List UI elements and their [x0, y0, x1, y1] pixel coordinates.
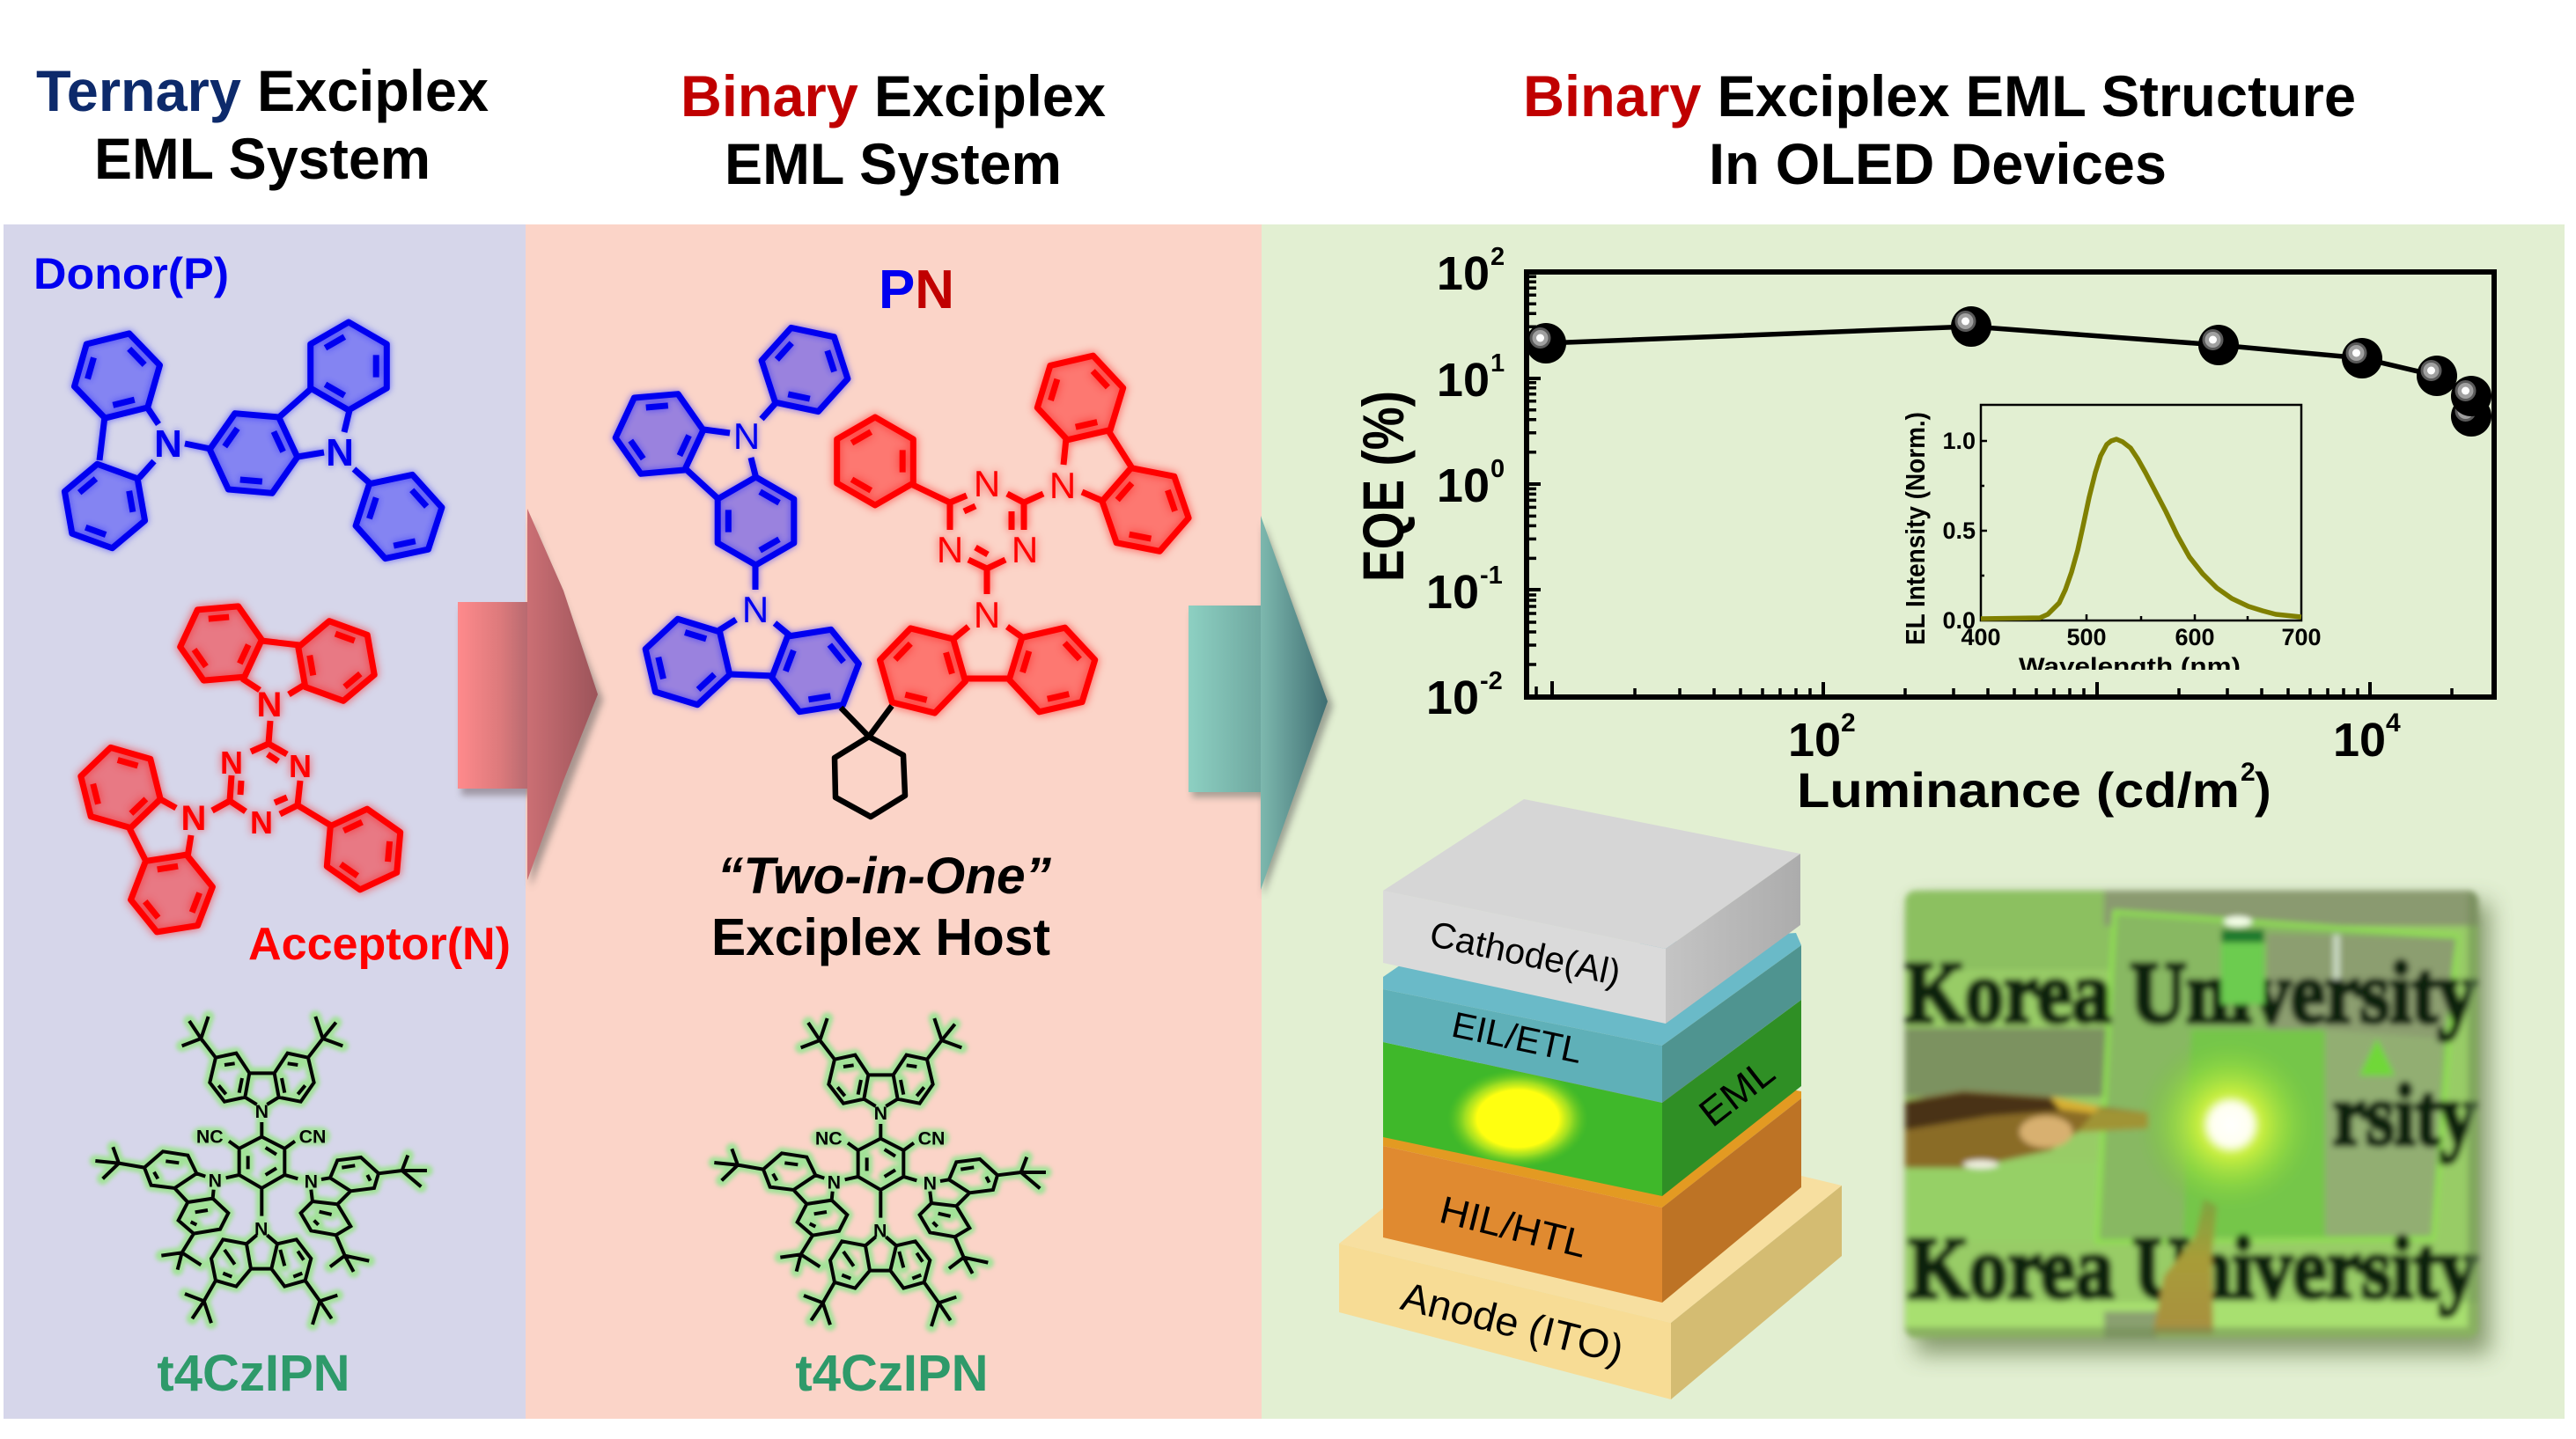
layer: cathode: Cathode(Al) [1426, 914, 1624, 994]
heading: binary exciplex EML structure in OLED devices [1523, 63, 2356, 196]
layer: HIL/HTL [1383, 1039, 1801, 1303]
layer: anode: Anode (ITO) [1397, 1273, 1628, 1372]
inset: EL spectrum: 700 [2281, 624, 2322, 650]
x axis tick labels: 4 [2386, 708, 2401, 738]
x axis title: Luminance (cd/m [1797, 762, 2240, 818]
heading: binary exciplex EML system: Binary Exciplex [681, 63, 1106, 128]
label: t4CzIPN right: t4CzIPN [795, 1345, 989, 1402]
donor part: N [733, 415, 760, 457]
molecule: t4CzIPN in ternary system: N [305, 1171, 318, 1192]
molecule: acceptor: N [250, 804, 273, 841]
device stack: OLED layers [1339, 799, 1842, 1399]
y axis tick labels: -2 [1480, 667, 1503, 695]
y axis tick labels: 1 [1490, 349, 1505, 378]
heading: binary exciplex EML structure in OLED devices: Binary Exciplex EML Structure [1523, 63, 2356, 128]
y axis tick labels [1426, 243, 1505, 724]
x axis title: ) [2255, 762, 2271, 818]
heading: ternary exciplex EML system: Ternary Exciplex [36, 58, 489, 123]
x axis title: 2 [2241, 758, 2256, 787]
molecule: t4CzIPN in binary system: N [874, 1103, 887, 1124]
molecule: donor: N [154, 422, 182, 466]
heading: binary exciplex EML structure in OLED devices: In OLED Devices [1709, 131, 2167, 196]
molecule: donor [48, 312, 449, 570]
layer: EML [1383, 1000, 1801, 1196]
y axis tick labels: 10 [1426, 672, 1479, 724]
donor part [612, 312, 866, 725]
heading: ternary exciplex EML system: EML System [94, 126, 431, 191]
inset: EL spectrum: Wavelength (nm) [2019, 653, 2241, 679]
label: t4CzIPN left: t4CzIPN [157, 1345, 350, 1402]
photo shadow [1916, 903, 2490, 1354]
arrow: binary to device [1189, 516, 1333, 896]
acceptor part: N [937, 529, 963, 570]
inset: EL spectrum: 400 [1961, 624, 2001, 650]
acceptor part: N [1049, 465, 1076, 506]
y axis tick labels: 10 [1437, 354, 1490, 407]
bottom probe [2153, 1199, 2217, 1334]
x axis tick labels: 10 [1788, 714, 1841, 767]
molecule: t4CzIPN in binary system: NC [815, 1128, 843, 1149]
molecule: acceptor: N [181, 799, 206, 838]
y axis tick labels: 0 [1490, 455, 1505, 483]
label: Donor(P): Donor(P) [33, 249, 229, 298]
y axis tick labels: 2 [1490, 243, 1505, 271]
y axis title: EQE (%) [1351, 391, 1416, 582]
arrow: ternary to binary [458, 509, 603, 887]
donor part: N [742, 589, 769, 630]
molecule: t4CzIPN in ternary system: NC [196, 1127, 224, 1148]
molecule: t4CzIPN in binary system: N [828, 1171, 841, 1193]
inset: EL spectrum [1900, 405, 2322, 679]
heading: ternary exciplex EML system [36, 58, 489, 191]
layer: HIL/HTL: HIL/HTL [1436, 1188, 1591, 1266]
tab over text [2221, 943, 2264, 1004]
panel: ternary exciplex background [4, 224, 526, 1419]
inset: EL spectrum: EL Intensity (Norm.) [1900, 412, 1931, 645]
device glass [2097, 912, 2457, 1242]
label: Two-in-One exciplex host [711, 848, 1051, 966]
y axis tick labels: -1 [1480, 562, 1503, 590]
label: Two-in-One exciplex host: Exciplex Host [711, 908, 1050, 966]
molecule: two-in-one exciplex host [612, 312, 1203, 817]
molecule: t4CzIPN in ternary system [95, 1017, 427, 1325]
inset: EL spectrum: 500 [2066, 624, 2107, 650]
molecule: acceptor: N [257, 686, 282, 724]
layer: EML: EML [1691, 1050, 1783, 1135]
cyclohexane linker [835, 706, 905, 817]
molecule: t4CzIPN in binary system [714, 1018, 1046, 1326]
edge vignette [1905, 891, 2478, 1338]
photo content [1904, 891, 2478, 1338]
emission glow [2149, 1054, 2301, 1195]
molecule: t4CzIPN in ternary system: N [255, 1101, 269, 1122]
inset: EL spectrum: 0.5 [1942, 518, 1976, 544]
panel: binary exciplex background [526, 224, 1262, 1419]
data markers [1526, 306, 2491, 437]
acceptor part: N [1012, 529, 1038, 570]
molecule: t4CzIPN in ternary system: N [209, 1170, 222, 1191]
y axis tick labels: 10 [1426, 566, 1479, 619]
x axis tick labels: 2 [1841, 708, 1856, 738]
molecule: t4CzIPN in ternary system: N [254, 1218, 268, 1239]
inset: EL spectrum: 1.0 [1942, 428, 1976, 454]
label: Acceptor(N): Acceptor(N) [248, 919, 511, 970]
panel: OLED device background [1262, 224, 2565, 1419]
acceptor part: N [974, 594, 1000, 635]
x axis tick labels [1788, 708, 2401, 767]
blackletter text: Korea University [1904, 943, 2477, 1041]
chart: EQE vs luminance [1351, 243, 2494, 818]
molecule: t4CzIPN in binary system: N [924, 1172, 937, 1193]
acceptor part [818, 345, 1203, 729]
x axis tick labels: 10 [2333, 714, 2386, 767]
layer: anode [1339, 1106, 1842, 1399]
layer: EIL/ETL [1383, 933, 1801, 1103]
label: Two-in-One exciplex host: “Two-in-One” [718, 848, 1051, 905]
data line [1544, 327, 2471, 416]
molecule: donor: N [326, 431, 354, 474]
photo content: Korea University [1909, 1219, 2477, 1317]
molecule: acceptor: N [289, 748, 312, 784]
molecule: acceptor: N [220, 745, 243, 781]
inset: EL spectrum: 600 [2175, 624, 2215, 650]
molecule: acceptor [71, 605, 416, 936]
molecule: t4CzIPN in binary system: CN [918, 1128, 945, 1149]
molecule: t4CzIPN in ternary system: CN [299, 1127, 326, 1148]
layer: EIL/ETL: EIL/ETL [1448, 1004, 1586, 1071]
layer: cathode [1383, 799, 1800, 1024]
heading: binary exciplex EML system: EML System [725, 131, 1062, 196]
molecule: t4CzIPN in binary system: N [873, 1220, 887, 1241]
y axis tick labels: 10 [1437, 247, 1490, 300]
y axis tick labels: 10 [1437, 459, 1490, 512]
photo: lit OLED device on Korea University text [1904, 891, 2490, 1354]
heading: binary exciplex EML system [681, 63, 1106, 196]
photo content: rsity [2333, 1066, 2477, 1164]
inset: EL spectrum: 0.0 [1942, 607, 1976, 634]
left probe [1905, 1090, 2148, 1168]
plot frame and ticks [1527, 272, 2494, 697]
acceptor part: N [974, 463, 1000, 504]
label: PN: PN [879, 260, 954, 320]
